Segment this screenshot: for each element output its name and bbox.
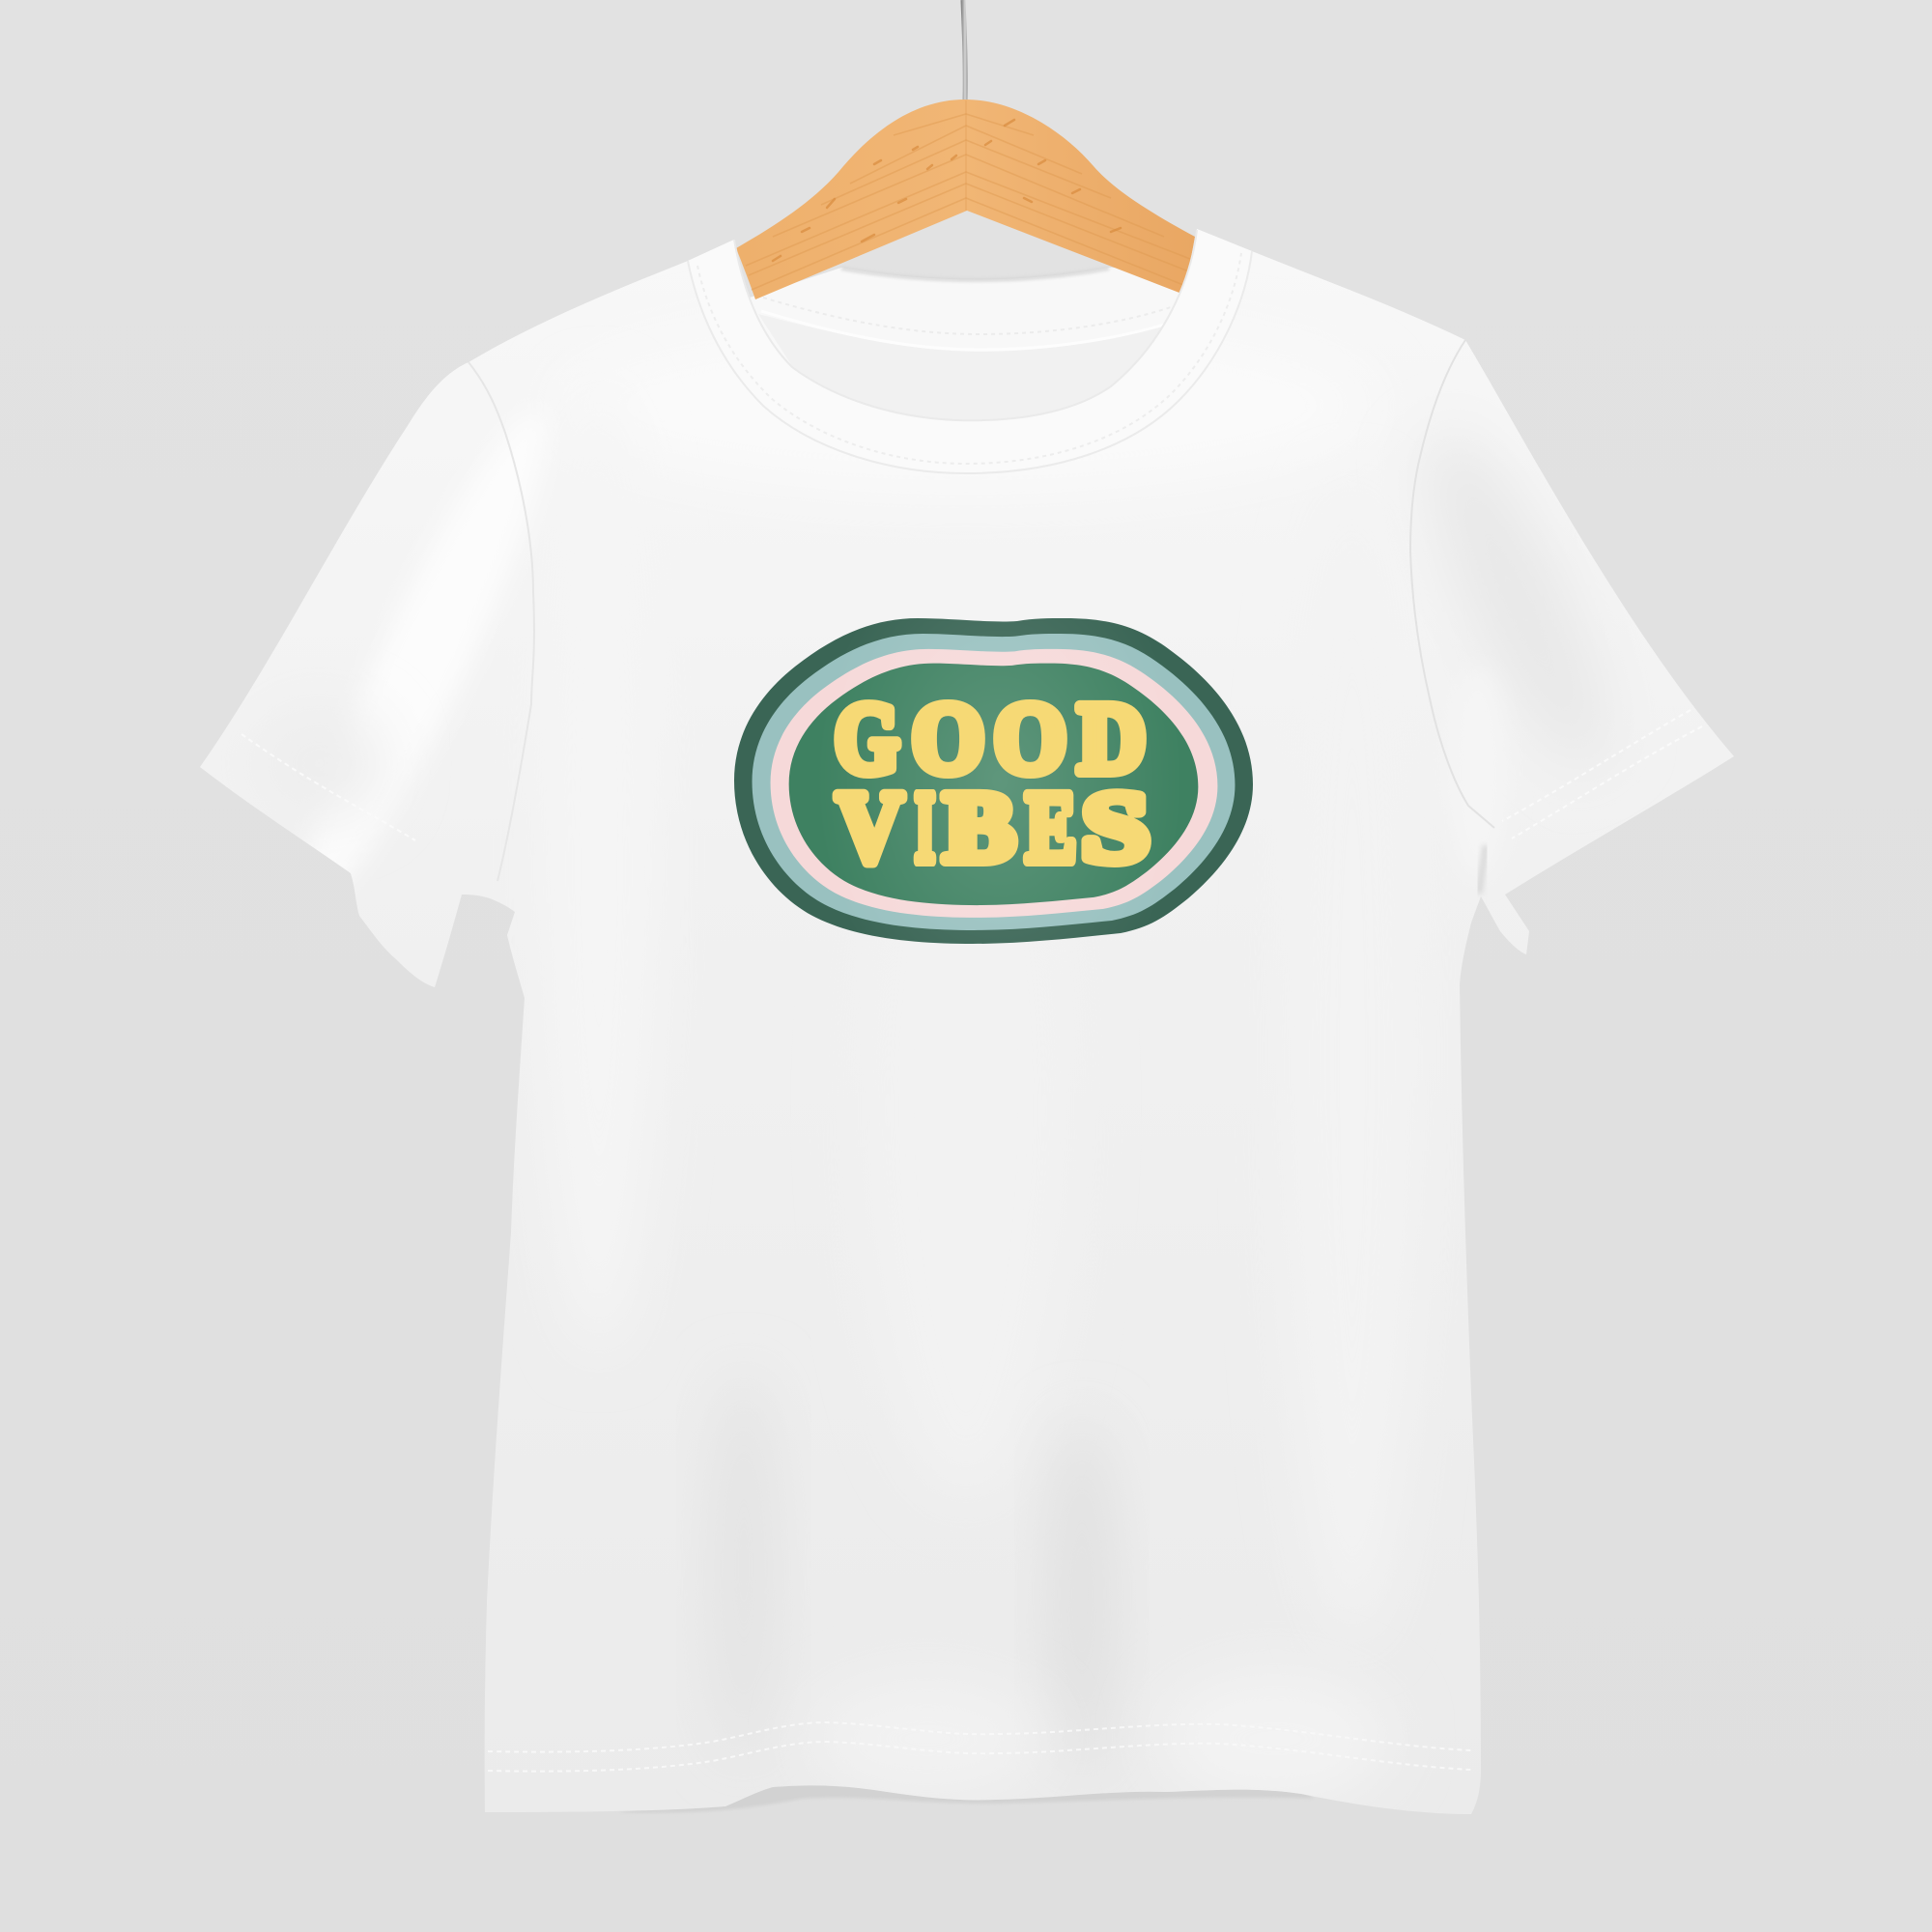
left cuff stitching: [242, 734, 415, 840]
heading: VIBES: E: [1026, 772, 1076, 883]
shirt back inside neck: [744, 268, 1208, 435]
front collar: [688, 229, 1252, 473]
badge pink ring: [771, 649, 1217, 918]
left sleeve shading: [319, 514, 491, 868]
badge teal ring: [753, 634, 1235, 930]
icon: wooden hanger: [736, 99, 1195, 299]
heading: GOOD: G: [835, 683, 899, 794]
icon: hanger wire hook: [963, 0, 965, 101]
t-shirt mockup scene: [200, 0, 1734, 1814]
shirt shading folds: [319, 247, 1578, 1692]
right sleeve shading: [1441, 464, 1578, 711]
left sleeve seam: [469, 362, 534, 881]
heading: VIBES: B: [944, 772, 1015, 883]
right cuff stitching: [1502, 710, 1702, 838]
heading: GOOD: O: [994, 683, 1066, 794]
right sleeve seam: [1410, 340, 1494, 828]
badge outer dark green ring: [734, 618, 1253, 944]
badge: Good Vibes graphic: [734, 617, 1256, 946]
heading: VIBES: V: [837, 772, 903, 883]
wood pores: [773, 120, 1121, 261]
heading: GOOD: D: [1078, 683, 1146, 794]
heading: VIBES: S: [1082, 772, 1150, 883]
shirt body silhouette: [200, 229, 1734, 1814]
t-shirt: [200, 229, 1734, 1814]
badge sheen: [864, 618, 1136, 944]
shirt back hem layer: [618, 1777, 1314, 1813]
bottom hem stitching: [488, 1722, 1471, 1772]
heading: GOOD: O: [912, 683, 984, 794]
heading: VIBES: I: [915, 772, 935, 883]
badge green centre: [789, 664, 1198, 905]
wood grain: [746, 100, 1190, 290]
